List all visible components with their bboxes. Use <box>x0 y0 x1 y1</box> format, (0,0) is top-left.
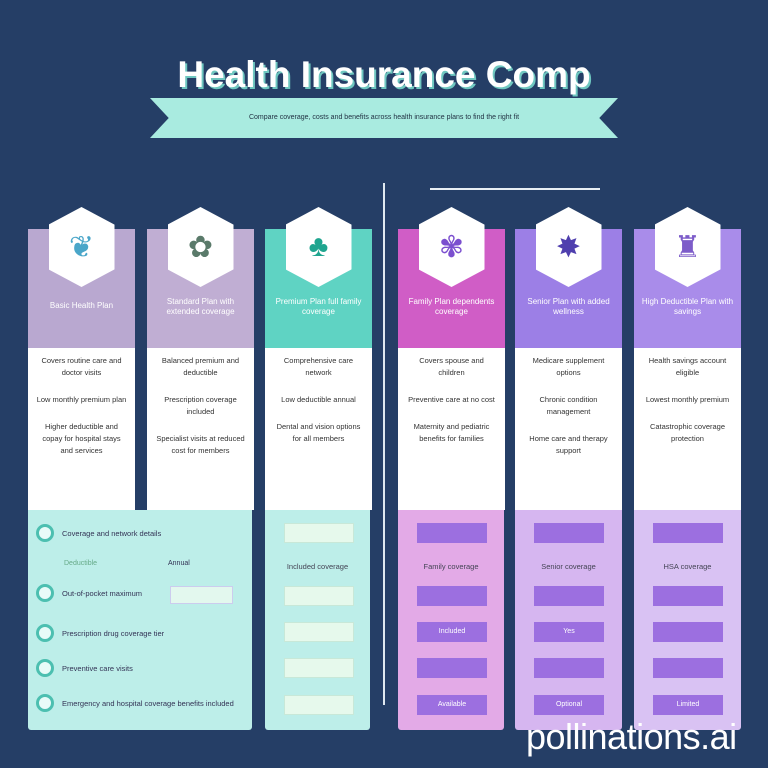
column 5 <box>515 229 622 510</box>
panel: features list: Out-of-pocket maximum <box>62 588 142 598</box>
ribbon banner: Compare coverage, costs and benefits across health insurance plans to find the right fit <box>249 114 519 121</box>
panel: col4 values <box>398 510 504 730</box>
panel: features list: Prescription drug coverage tier <box>62 628 164 638</box>
panel: col5 values: Optional <box>556 701 582 708</box>
column 1: Higher deductible and copay for hospital stays and services <box>42 422 121 455</box>
column 4: Family Plan dependents coverage <box>409 297 494 316</box>
column 3: Comprehensive care network <box>284 356 353 377</box>
column 6: Lowest monthly premium <box>646 395 729 404</box>
column 6: Catastrophic coverage protection <box>650 422 725 443</box>
column 5: Chronic condition management <box>540 395 597 416</box>
column 4: Maternity and pediatric benefits for families <box>414 422 489 443</box>
column 4: Covers spouse and children <box>419 356 484 377</box>
column 6: ♜ <box>674 230 701 264</box>
panel: col6 values <box>634 510 741 730</box>
column 5: Home care and therapy support <box>529 434 608 455</box>
column 3 <box>265 229 372 510</box>
column 1: Basic Health Plan <box>50 301 113 310</box>
column 2: Specialist visits at reduced cost for members <box>156 434 245 455</box>
column 5: ✸ <box>556 230 581 264</box>
column 1: Low monthly premium plan <box>37 395 126 404</box>
panel: col3 values: Included coverage <box>287 562 348 571</box>
panel: col6 values: Limited <box>677 701 699 708</box>
panel: col5 values: Yes <box>563 628 575 635</box>
column 6 <box>634 229 741 510</box>
panel: col4 values: Family coverage <box>423 562 479 571</box>
column 5: Medicare supplement options <box>533 356 604 377</box>
column 1: ❦ <box>69 230 94 264</box>
column 6: High Deductible Plan with savings <box>642 297 733 316</box>
title: Health Insurance Comp <box>177 54 591 95</box>
panel: col5 values <box>515 510 622 730</box>
column 6: Health savings account eligible <box>649 356 726 377</box>
watermark: pollinations.ai <box>526 716 737 757</box>
column 3: Low deductible annual <box>281 395 356 404</box>
panel: col4 values: Available <box>438 701 466 708</box>
column 2: Standard Plan with extended coverage <box>166 297 235 316</box>
column 2 <box>147 229 254 510</box>
column 3: Premium Plan full family coverage <box>276 297 361 316</box>
column 4 <box>398 229 505 510</box>
panel: col6 values: HSA coverage <box>664 562 711 571</box>
column 1: Covers routine care and doctor visits <box>41 356 122 377</box>
column 3: Dental and vision options for all members <box>277 422 360 443</box>
column 4: Preventive care at no cost <box>408 395 495 404</box>
panel: features list <box>28 510 252 730</box>
divider <box>383 183 385 705</box>
column 2: ✿ <box>188 230 213 264</box>
column 3: ♣ <box>309 230 328 263</box>
column 2: Prescription coverage included <box>164 395 237 416</box>
panel: col3 values <box>265 510 370 730</box>
panel: features list: Annual <box>168 560 190 567</box>
panel: features list: Emergency and hospital coverage benefits included <box>62 698 234 708</box>
ribbon banner <box>150 98 618 138</box>
panel: features list: Preventive care visits <box>62 664 133 672</box>
panel: features list: Deductible <box>64 560 97 567</box>
panel: col5 values: Senior coverage <box>541 562 596 571</box>
column 5: Senior Plan with added wellness <box>527 297 610 316</box>
column 4: ✾ <box>439 230 464 264</box>
panel: col4 values: Included <box>439 628 465 635</box>
column 2: Balanced premium and deductible <box>162 356 239 377</box>
panel: features list: Coverage and network details <box>62 528 161 538</box>
column 1 <box>28 229 135 510</box>
